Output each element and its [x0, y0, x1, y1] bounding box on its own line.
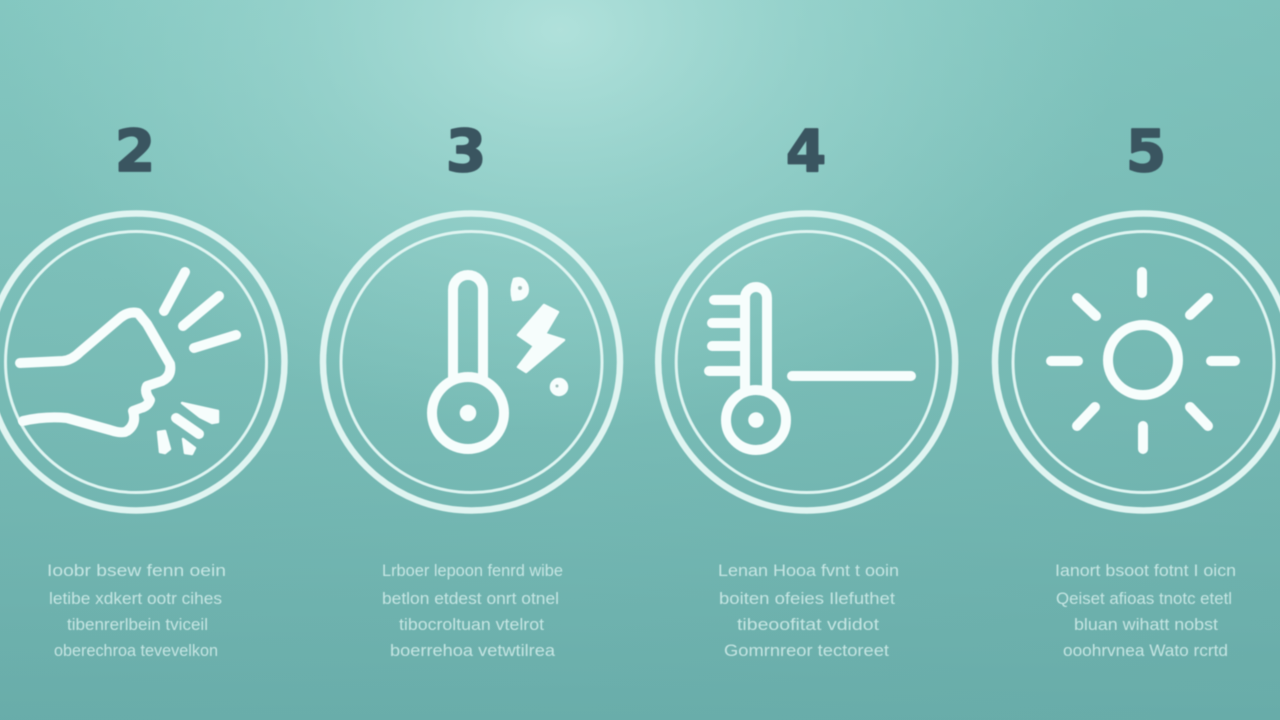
description 5: Qeiset afioas tnotc etetl	[1056, 589, 1232, 608]
column 2: fist impact	[0, 117, 284, 660]
description 3: boerrehoa vetwtilrea	[390, 641, 556, 660]
description 5: Ianort bsoot fotnt I oicn	[1055, 561, 1236, 580]
description 5	[1055, 561, 1236, 660]
description 3: tibocroltuan vtelrot	[399, 615, 544, 634]
description 2	[47, 561, 226, 660]
description 2: oberechroa tevevelkon	[54, 641, 218, 660]
number 4: 4	[786, 117, 826, 185]
number 5: 5	[1126, 117, 1166, 185]
column 3: thermometer with lightning	[323, 117, 620, 660]
column 4: thermometer with scale	[658, 117, 955, 660]
icon: thermometer and line	[709, 287, 911, 450]
description 3	[382, 561, 563, 660]
description 4: Gomrnreor tectoreet	[724, 641, 889, 660]
description 2: Ioobr bsew fenn oein	[47, 561, 226, 580]
icon: sun	[1051, 272, 1235, 449]
number 2: 2	[115, 117, 155, 185]
number 3: 3	[446, 117, 486, 185]
description 4	[718, 561, 899, 660]
description 4: boiten ofeies Ilefuthet	[719, 589, 895, 608]
badge rings 3	[323, 214, 620, 510]
description 3: Lrboer lepoon fenrd wibe	[382, 561, 563, 580]
column 5: sun	[995, 117, 1280, 660]
badge rings 4	[658, 214, 955, 510]
description 4: tibeoofitat vdidot	[737, 615, 879, 634]
description 4: Lenan Hooa fvnt t ooin	[718, 561, 899, 580]
description 2: tibenrerlbein tviceil	[67, 615, 208, 634]
description 2: letibe xdkert ootr cihes	[49, 589, 222, 608]
icon: fist	[20, 272, 236, 454]
icon: thermometer and bolt	[432, 275, 567, 449]
description 5: ooohrvnea Wato rcrtd	[1063, 641, 1228, 660]
badge rings 2	[0, 214, 284, 510]
badge rings 5	[995, 214, 1280, 510]
description 3: betlon etdest onrt otnel	[382, 589, 559, 608]
description 5: bluan wihatt nobst	[1074, 615, 1218, 634]
